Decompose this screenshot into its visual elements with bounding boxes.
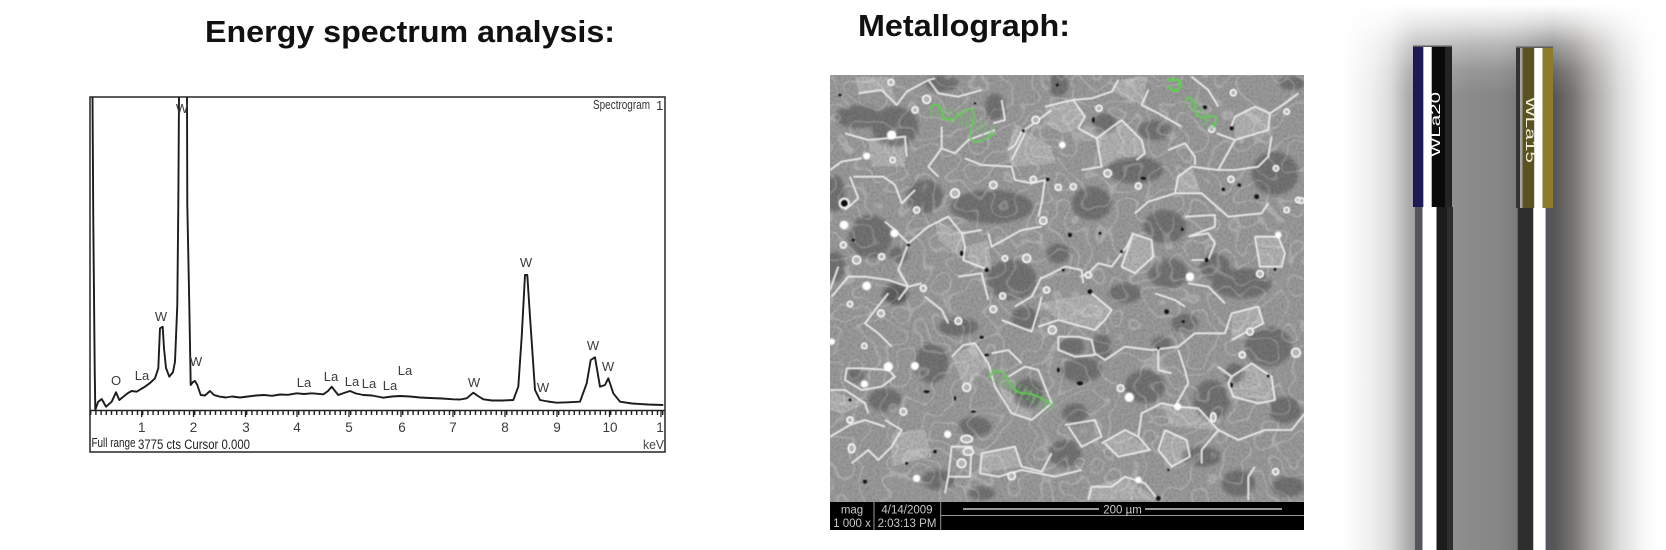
readout: counts and cursor: 3775 cts Cursor 0.000: [138, 437, 250, 452]
axis numbers: [138, 420, 664, 435]
axis numbers: 10: [602, 420, 618, 435]
chart title: spectrogram: Spectrogram: [593, 98, 650, 112]
dark grain patches, lower half: [846, 287, 1305, 500]
peak labels: La: [383, 378, 398, 393]
heading: energy spectrum analysis: Energy spectrum analysis:: [205, 14, 615, 49]
data bar labels: [833, 504, 1142, 530]
micrograph image: [824, 69, 1310, 508]
axis numbers: 5: [345, 420, 353, 435]
spectrum curve: [92, 97, 663, 410]
peak labels: La: [398, 363, 413, 378]
peak labels: W: [190, 354, 203, 369]
peak labels: La: [324, 369, 339, 384]
peak labels: W: [155, 309, 168, 324]
micrograph data bar: [830, 502, 1304, 530]
axis numbers: 1: [138, 420, 145, 435]
pore with halo: [840, 199, 849, 208]
chart number: 1: [656, 98, 663, 113]
peak labels: La: [345, 374, 360, 389]
data bar labels: 1 000 x: [833, 518, 871, 530]
peak labels: La: [297, 375, 312, 390]
x axis: [90, 410, 665, 417]
grain surface texture: [830, 75, 1304, 502]
fine boundary network: [830, 75, 1304, 502]
panel: tungsten electrodes: [1357, 8, 1642, 550]
axis unit: keV: [643, 438, 665, 452]
inclusions, upper half: [838, 79, 1304, 299]
electrode: WLa20: [1413, 46, 1453, 550]
green analysis trace 1: [931, 105, 995, 142]
peak labels: W: [602, 359, 615, 374]
soft shadow behind electrodes: [1340, 0, 1666, 550]
peak labels: W: [587, 338, 600, 353]
axis numbers: 1: [656, 420, 664, 435]
grain boundaries, lower half: [830, 293, 1305, 500]
data bar labels: 4/14/2009: [881, 504, 933, 516]
heading: metallograph: Metallograph:: [858, 8, 1070, 43]
readout: full range: Full range: [92, 435, 136, 450]
band label WLa15: WLa15: [1523, 97, 1539, 163]
axis numbers: 9: [553, 420, 561, 435]
axis numbers: 8: [501, 420, 509, 435]
inclusions, lower half: [828, 301, 1300, 501]
dark grain patches, upper half: [825, 73, 1305, 305]
light grains, upper half: [855, 77, 1285, 273]
band label WLa20: WLa20: [1427, 92, 1443, 157]
electrode: WLa15: [1516, 46, 1554, 550]
data bar labels: mag: [841, 504, 863, 516]
axis numbers: 6: [398, 420, 406, 435]
panel: spectrum chart: [90, 97, 665, 452]
peak labels: W: [537, 380, 550, 395]
panel: metallograph micrograph: [824, 69, 1310, 530]
green analysis trace 2: [1168, 80, 1216, 127]
grain boundaries, upper half: [830, 77, 1298, 307]
peak labels: W: [176, 101, 189, 116]
axis numbers: 2: [190, 420, 197, 435]
light grains, lower half: [830, 293, 1275, 500]
axis numbers: 4: [293, 420, 301, 435]
data bar labels: 200 µm: [1103, 504, 1142, 516]
scale bar: [963, 508, 1282, 510]
peak labels: O: [111, 373, 121, 388]
peak labels: W: [468, 375, 481, 390]
axis numbers: 7: [449, 420, 457, 435]
peak labels: La: [135, 368, 150, 383]
peak labels: W: [520, 255, 533, 270]
peak labels: La: [362, 376, 377, 391]
axis numbers: 3: [242, 420, 250, 435]
data bar labels: 2:03:13 PM: [878, 518, 936, 530]
green analysis trace 3: [989, 371, 1052, 407]
peak labels: [111, 101, 615, 395]
chart frame: [90, 97, 665, 452]
